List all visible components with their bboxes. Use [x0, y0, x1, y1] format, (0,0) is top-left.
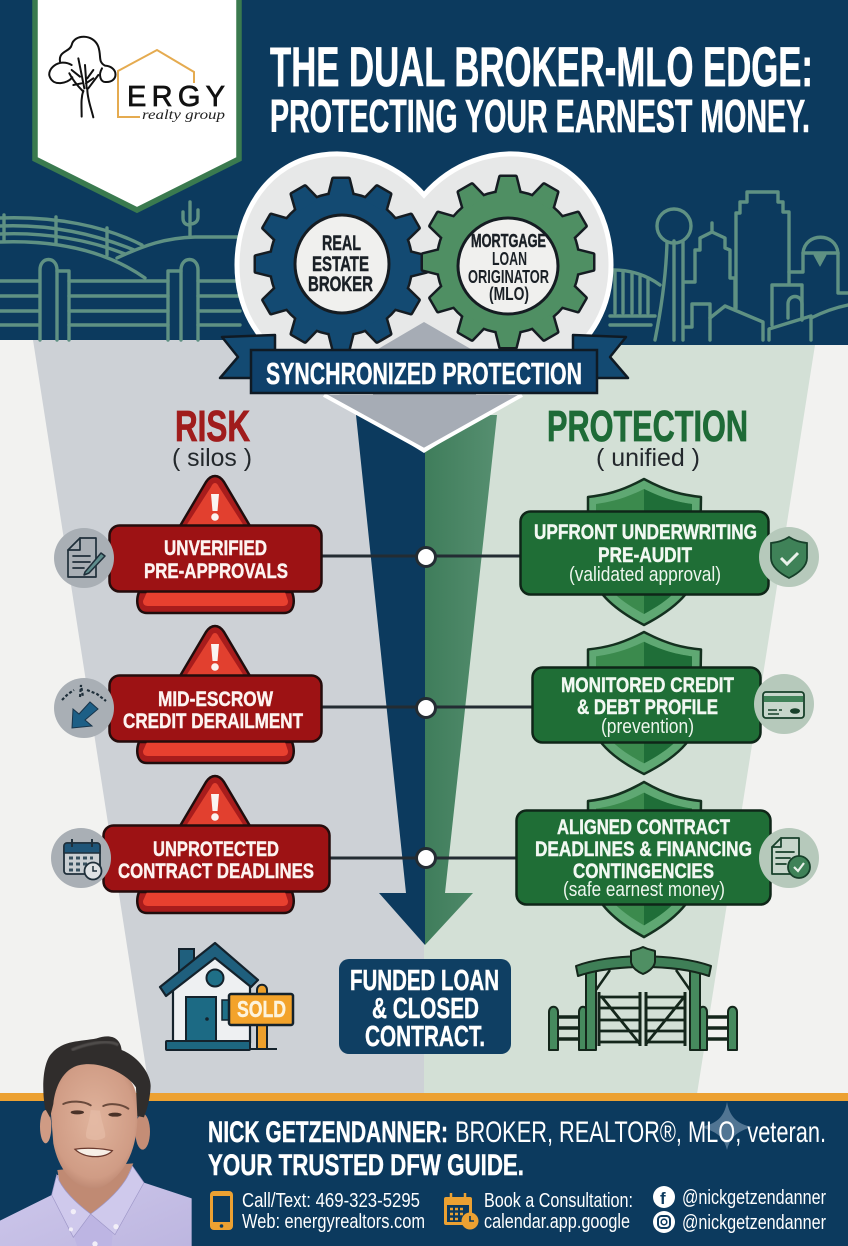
- gear label: MORTGAGE: [471, 231, 546, 251]
- icon: facebook: [653, 1186, 675, 1208]
- icon: phone: [210, 1191, 233, 1230]
- risk item 1: [54, 476, 322, 613]
- decorative star mark: [700, 1102, 752, 1150]
- gear: mortgage loan originator: [423, 177, 593, 347]
- callout: funded loan: FUNDED LOAN: [350, 965, 499, 997]
- illustration: fence and hills skyline: [0, 202, 240, 340]
- contact: phone and web: Call/Text: 469-323-5295: [242, 1190, 420, 1212]
- portrait: [0, 1036, 192, 1246]
- heading: risk: [172, 402, 252, 472]
- title: [270, 35, 813, 142]
- footer orange bar: [0, 1093, 848, 1101]
- icon: shield with check: [759, 527, 819, 587]
- protection item 2: (prevention): [601, 716, 694, 738]
- timeline nodes: [416, 548, 436, 868]
- footer band: [0, 1101, 848, 1246]
- contact: booking: Book a Consultation:: [484, 1190, 633, 1212]
- protection item 3: [516, 782, 819, 937]
- heading: risk: ( silos ): [172, 444, 252, 472]
- footer headline: NICK GETZENDANNER:: [208, 1116, 448, 1149]
- protection item 3: (safe earnest money): [563, 879, 725, 901]
- icon: calendar with clock: [51, 828, 111, 888]
- risk item 2: [54, 626, 322, 763]
- gear label: [468, 231, 549, 304]
- ribbon: synchronized protection: SYNCHRONIZED PROTECTION: [266, 356, 582, 391]
- icon: document and pen: [54, 528, 114, 588]
- callout: funded loan: [339, 959, 511, 1054]
- panel: protection funnel: [424, 345, 815, 1094]
- risk item 1: UNVERIFIED: [164, 537, 267, 560]
- contact: phone and web: Web: energyrealtors.com: [242, 1211, 425, 1233]
- connector lines: [322, 556, 532, 858]
- risk item 2: CREDIT DERAILMENT: [123, 710, 303, 733]
- ribbon: synchronized protection: [220, 335, 628, 393]
- icon: credit card: [754, 674, 814, 734]
- risk item 3: [51, 776, 330, 913]
- contact: social: [653, 1186, 826, 1234]
- protection item 1: PRE-AUDIT: [598, 544, 692, 567]
- panel: risk funnel: [33, 340, 424, 1094]
- icon: sold house: SOLD: [237, 996, 286, 1022]
- gear label: LOAN: [492, 249, 527, 269]
- risk item 2: MID-ESCROW: [158, 688, 273, 711]
- gear label: BROKER: [308, 273, 373, 296]
- logo script: realty group: [142, 108, 225, 123]
- logo badge: [35, 0, 239, 210]
- illustration: Dallas skyline: [610, 192, 848, 340]
- heading: protection: [547, 402, 748, 472]
- callout: funded loan: CONTRACT.: [365, 1021, 485, 1053]
- protection item 2: & DEBT PROFILE: [577, 696, 718, 719]
- icon: falling credit gauge: [54, 678, 114, 738]
- protection item 2: [532, 632, 814, 774]
- risk item 1: PRE-APPROVALS: [144, 560, 288, 583]
- icon: instagram: [653, 1211, 675, 1233]
- risk item 3: UNPROTECTED: [153, 838, 279, 861]
- logo house outline: [118, 50, 194, 117]
- header band: [0, 0, 848, 345]
- icon: logo tree: [49, 37, 115, 117]
- contact: booking: calendar.app.google: [484, 1211, 630, 1233]
- icon: facebook: f: [660, 1189, 666, 1208]
- gear label: (MLO): [489, 284, 529, 304]
- icon: calendar: [444, 1193, 478, 1230]
- protection item 3: DEADLINES & FINANCING: [535, 838, 752, 861]
- heading: protection: ( unified ): [596, 444, 700, 472]
- footer headline: [208, 1116, 826, 1182]
- icon: sold house: [160, 943, 293, 1050]
- logo wordmark: ERGY: [127, 81, 225, 113]
- central arrow: [356, 415, 497, 945]
- gear label: ORIGINATOR: [468, 267, 549, 287]
- gear label: [308, 232, 373, 296]
- contact: phone and web: [242, 1190, 425, 1233]
- heading: risk: RISK: [175, 402, 250, 451]
- heading: protection: PROTECTION: [547, 402, 748, 451]
- protection item 3: CONTINGENCIES: [573, 860, 714, 883]
- funnel diamond: [324, 322, 522, 450]
- gear: real estate broker: [256, 179, 426, 349]
- protection item 2: MONITORED CREDIT: [561, 674, 734, 697]
- protection item 1: UPFRONT UNDERWRITING: [534, 521, 757, 544]
- contact: booking: [484, 1190, 633, 1233]
- callout: funded loan: & CLOSED: [372, 993, 479, 1025]
- protection item 1: (validated approval): [569, 564, 721, 586]
- icon: ranch gate: [549, 947, 737, 1050]
- risk item 3: CONTRACT DEADLINES: [118, 860, 314, 883]
- gear label: ESTATE: [312, 253, 369, 276]
- protection item 3: ALIGNED CONTRACT: [557, 816, 730, 839]
- protection item 1: [520, 479, 819, 625]
- heart backing for gears: [237, 154, 611, 450]
- footer headline: YOUR TRUSTED DFW GUIDE.: [208, 1149, 524, 1182]
- gear label: REAL: [322, 232, 361, 255]
- icon: document with check: [759, 828, 819, 888]
